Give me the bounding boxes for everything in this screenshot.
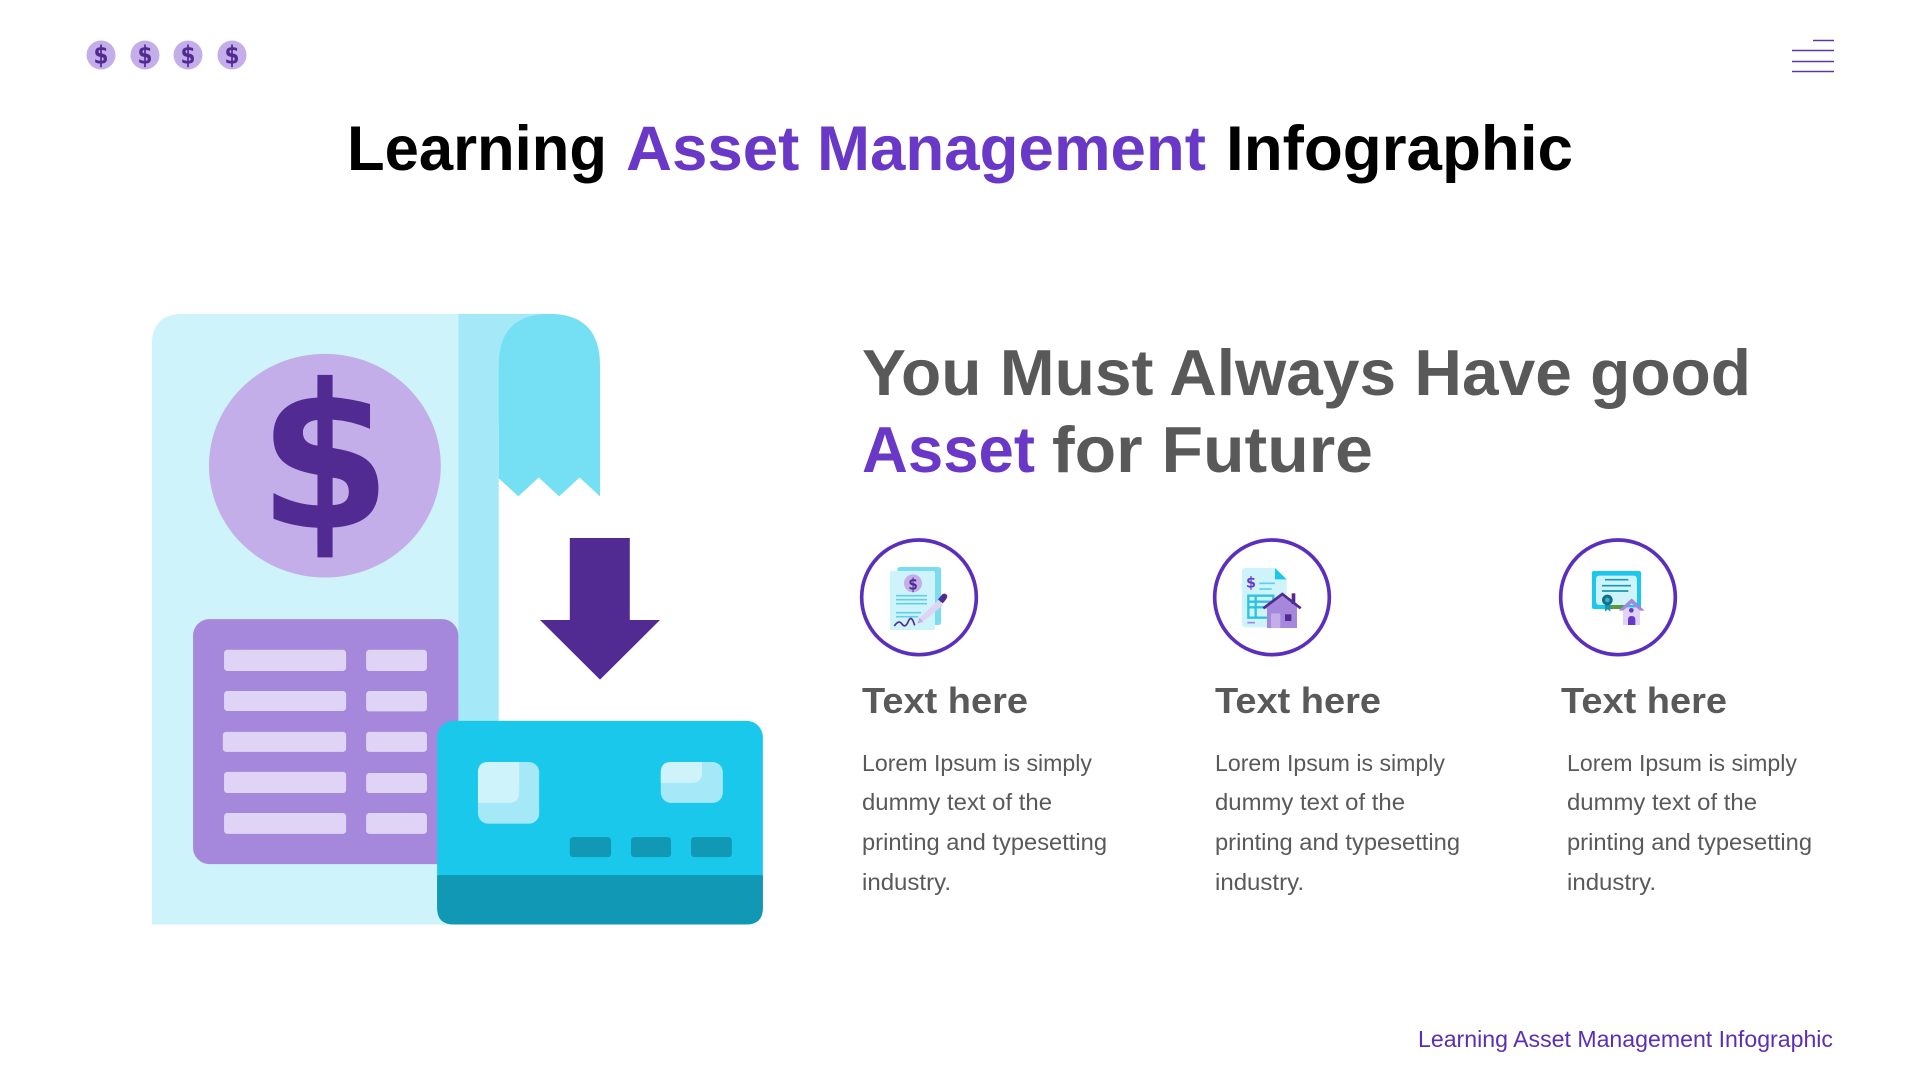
label: Text here [862,680,1028,721]
title: Learning [347,114,607,184]
description [862,750,1107,895]
dollar coin: $ [258,342,391,576]
dollar coin [209,342,441,578]
description: Lorem Ipsum is simply [862,750,1092,776]
description: printing and typesetting [862,829,1107,855]
icon: bill with house [1215,540,1329,655]
receipt paper [152,314,458,924]
heading: for Future [1052,413,1373,486]
icon row: dollar coins [86,40,246,70]
description: dummy text of the [1567,789,1757,815]
icon: bill with house: $ [1246,574,1256,592]
illustration: receipt, coin, table, arrow and credit card [152,314,763,924]
description: industry. [1215,869,1304,895]
icon row: dollar coins: $ [138,40,152,70]
credit card [437,721,763,924]
description: Lorem Ipsum is simply [1567,750,1797,776]
description: industry. [1567,869,1656,895]
icon: signed document: $ [908,574,918,593]
column 3: certificate icon and text [1561,540,1812,895]
description [1215,750,1460,895]
label: Text here [1561,680,1727,721]
description: printing and typesetting [1215,829,1460,855]
heading: Asset [862,413,1035,486]
icon row: dollar coins: $ [94,40,108,70]
title: Asset Management [626,114,1206,184]
table panel [193,619,458,864]
icon: signed document [862,540,976,655]
label: Text here [1215,680,1381,721]
icon row: dollar coins: $ [180,40,196,70]
description [1567,750,1812,895]
icon: menu lines [1792,40,1834,72]
title: Infographic [1226,114,1573,184]
description: Lorem Ipsum is simply [1215,750,1445,776]
column 1: document icon and text [862,540,1107,895]
column 2: house bill icon and text [1215,540,1460,895]
receipt torn tab [499,314,600,496]
footer: Learning Asset Management Infographic [1418,1026,1833,1052]
icon row: dollar coins: $ [224,40,240,70]
arrow down [540,538,660,680]
description: dummy text of the [862,789,1052,815]
heading: You Must Always Have good [862,336,1751,409]
receipt fold band [458,314,548,733]
icon: certificate with house [1561,540,1675,655]
title [347,114,1573,184]
description: dummy text of the [1215,789,1405,815]
heading [862,336,1751,486]
description: printing and typesetting [1567,829,1812,855]
description: industry. [862,869,951,895]
